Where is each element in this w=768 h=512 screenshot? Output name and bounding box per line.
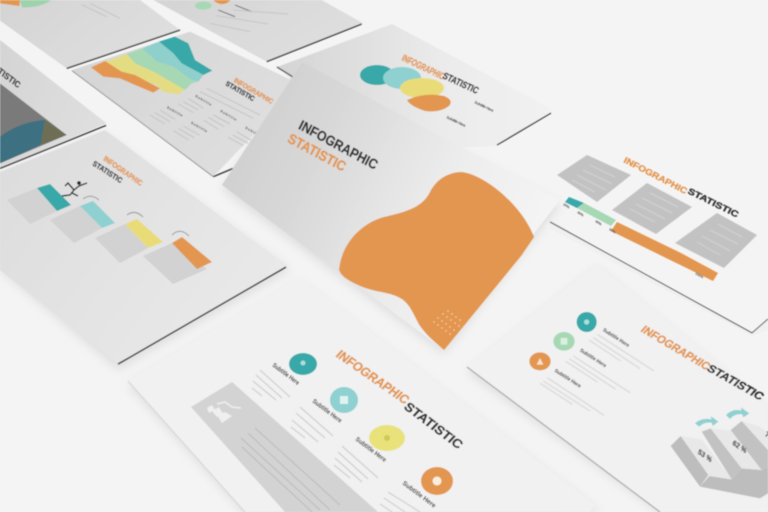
grey boxes xyxy=(557,155,757,268)
subtitles and text lines: Subtitle xyxy=(220,109,237,122)
icons xyxy=(529,312,597,370)
title: INFOGRAPHIC xyxy=(400,53,446,82)
step values: 62 % xyxy=(731,439,748,456)
subtitles xyxy=(553,328,630,389)
percent labels: 30% xyxy=(577,210,584,217)
title xyxy=(333,348,466,452)
subtitles and text lines xyxy=(150,88,262,146)
box text lines xyxy=(572,165,742,255)
title xyxy=(91,154,144,188)
step boxes xyxy=(7,188,207,284)
icon: chart xyxy=(207,402,241,423)
subtitles: Subtitle Here xyxy=(553,368,582,389)
title: INFOGRAPHIC xyxy=(296,117,381,173)
title: STATISTIC xyxy=(91,159,124,185)
card: left slide with chart xyxy=(0,40,107,168)
photo chart xyxy=(0,83,67,163)
card: bottom-right slide xyxy=(467,264,768,512)
card: large left slide with steps xyxy=(0,130,287,364)
steps chart xyxy=(671,407,768,498)
step tabs xyxy=(37,184,212,269)
step values xyxy=(697,430,768,465)
subtitles: Subtitle Here xyxy=(474,100,495,113)
title: INFOGRAPHIC xyxy=(102,154,144,188)
band text lines xyxy=(241,428,340,512)
segmented bar xyxy=(565,197,718,281)
title: STATISTIC xyxy=(441,71,480,97)
percent labels xyxy=(563,202,704,279)
title: STATISTIC xyxy=(401,400,466,452)
subtitles and text lines: Subtitle xyxy=(195,94,212,107)
subtitles xyxy=(271,362,437,510)
title xyxy=(638,323,767,403)
card: top-left slide xyxy=(0,0,180,68)
percent labels: 50% xyxy=(609,227,616,234)
orange blob xyxy=(339,172,534,350)
icons xyxy=(289,353,453,495)
title xyxy=(224,76,274,106)
card: right slide with bars xyxy=(545,155,768,336)
wave bands xyxy=(91,37,212,94)
subtitles and text lines: Subtitle xyxy=(190,121,208,133)
card: middle-left slide with waves xyxy=(72,32,302,177)
grey band xyxy=(191,382,378,512)
title: STATISTIC xyxy=(686,186,741,220)
title: STATISTIC xyxy=(704,362,767,403)
subtitles xyxy=(446,100,495,128)
title: STATISTIC xyxy=(285,130,349,174)
icon: runner xyxy=(62,182,87,196)
card: bottom-center slide xyxy=(128,277,595,512)
circle blocks xyxy=(360,65,451,111)
title: INFOGRAPHIC xyxy=(622,155,690,196)
subtitles and text lines: Subtitle xyxy=(245,126,262,138)
title: STATISTIC xyxy=(224,80,256,103)
step values: 53 % xyxy=(697,448,714,465)
card: top-center slide xyxy=(153,0,363,62)
body lines xyxy=(252,370,420,512)
percent labels: 20% xyxy=(563,202,570,209)
subtitles and text lines: Subtitle xyxy=(166,105,183,118)
title: INFOGRAPHIC xyxy=(232,76,274,106)
subtitles: Subtitle Here xyxy=(271,362,300,387)
title xyxy=(622,155,741,220)
arrows xyxy=(695,407,749,427)
subtitles: Subtitle Here xyxy=(311,398,343,425)
dots pattern xyxy=(433,310,461,335)
title: INFOGRAPHIC xyxy=(333,348,412,407)
title: INFOGRAPHIC xyxy=(638,323,714,373)
subtitles: Subtitle Here xyxy=(601,328,630,349)
subtitles: Subtitle Here xyxy=(446,115,467,128)
subtitles: Subtitle Here xyxy=(578,348,607,369)
percent labels: 100% xyxy=(695,271,704,279)
percent labels: 40% xyxy=(595,219,602,226)
curved arrows xyxy=(83,196,189,236)
card: top-middle slide with circles xyxy=(277,24,554,150)
subtitles: Subtitle Here xyxy=(354,436,387,464)
cover slide xyxy=(222,62,560,350)
body lines xyxy=(540,334,654,415)
